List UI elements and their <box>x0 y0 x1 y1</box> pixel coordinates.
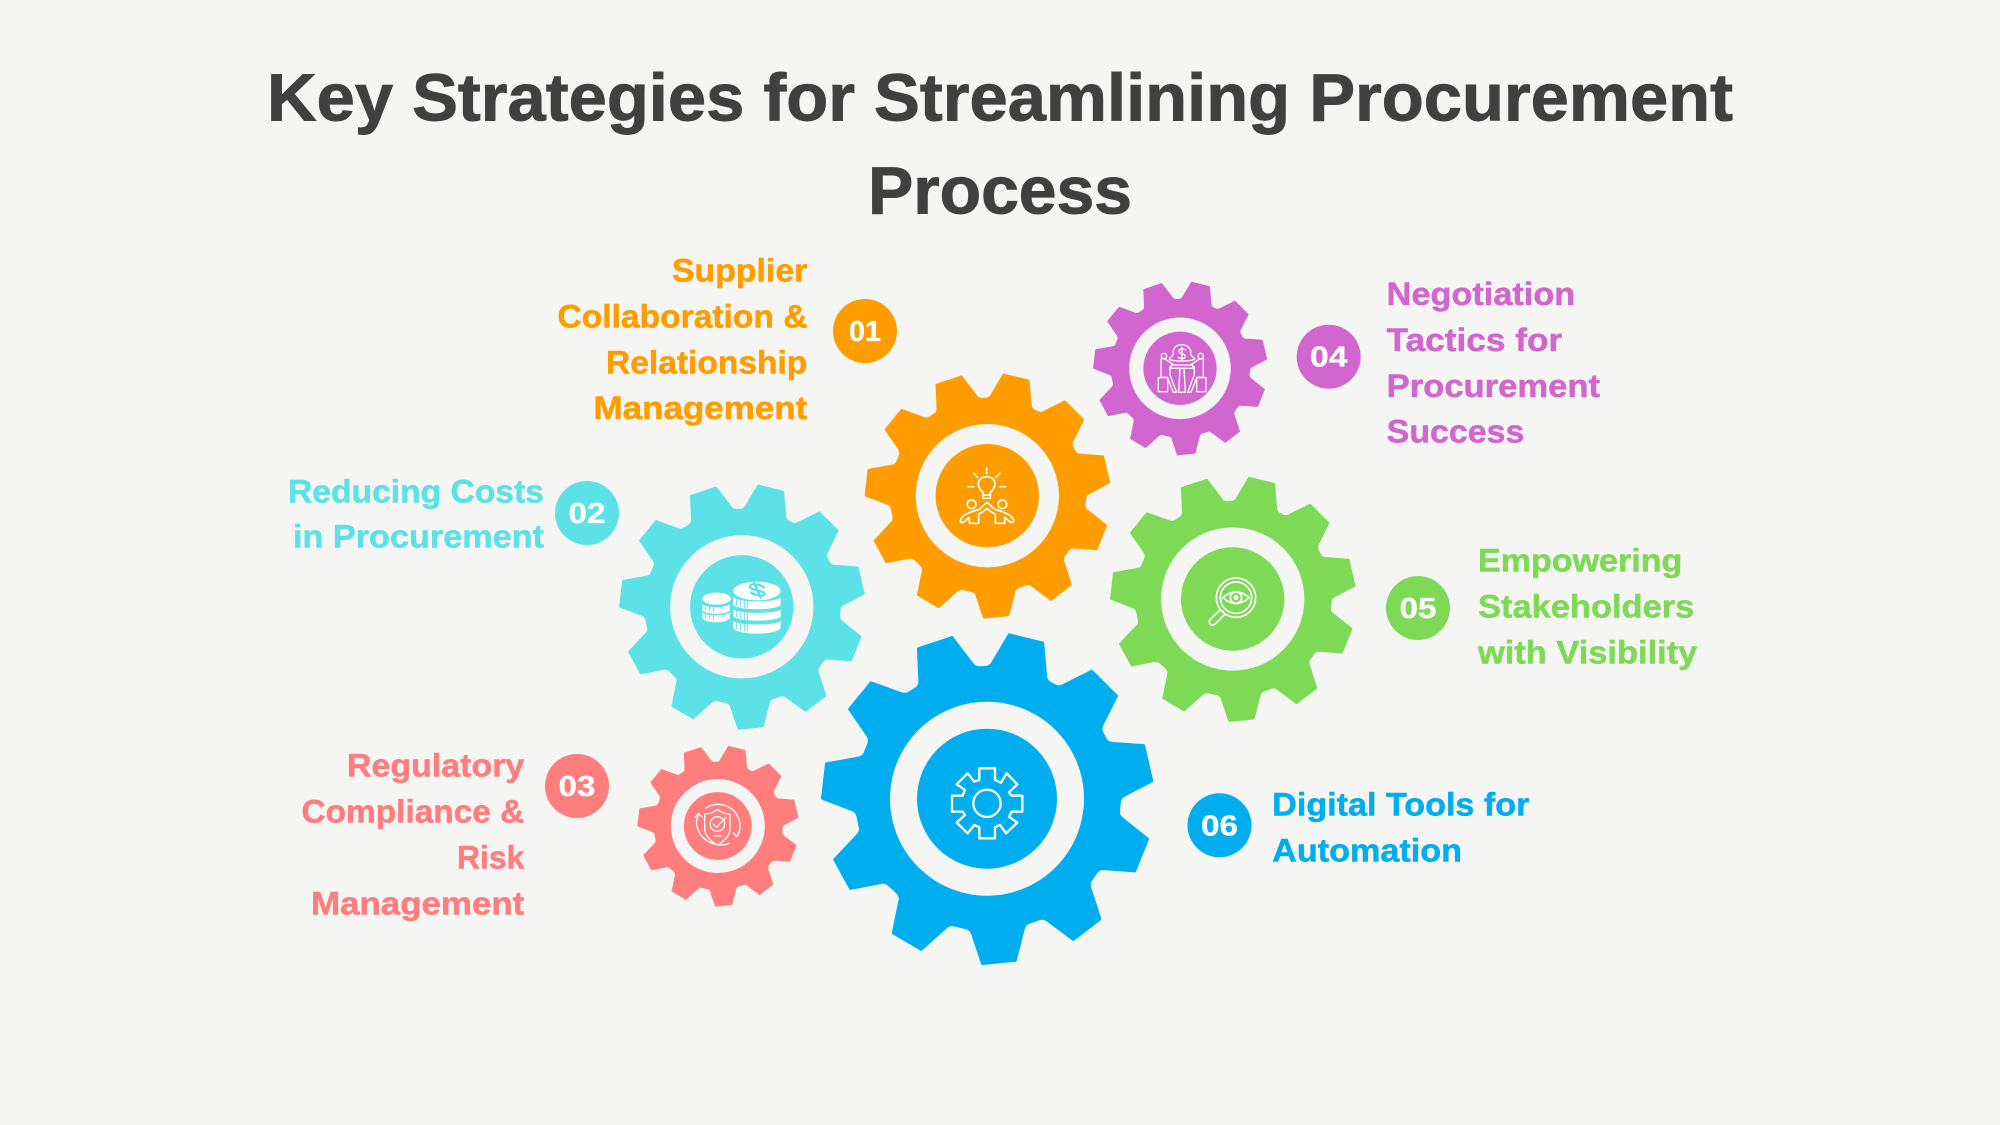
title: Process <box>868 154 1132 228</box>
gear 03 <box>638 747 798 906</box>
panel: 05 empowering stakeholders <box>1111 478 1698 721</box>
title: Key Strategies for Streamlining Procurement <box>267 60 1733 136</box>
label text 02: in Procurement <box>293 518 544 554</box>
icon: magnifying glass with eye <box>1209 578 1256 625</box>
title <box>267 60 1733 228</box>
icon: coin stacks <box>702 582 781 634</box>
label text 04: Success <box>1387 414 1524 450</box>
label text 01: Collaboration & <box>558 299 808 335</box>
gear 05 <box>1111 478 1355 721</box>
number badge 04 <box>1297 325 1361 389</box>
label text 05: with Visibility <box>1477 634 1698 670</box>
label text 01: Relationship <box>606 344 807 380</box>
label text 06: Automation <box>1272 833 1462 869</box>
number badge 05: 05 <box>1400 593 1436 625</box>
label text 05: Stakeholders <box>1478 589 1694 625</box>
number badge 03: 03 <box>558 771 596 803</box>
number badge 01 <box>833 299 897 363</box>
panel: 04 negotiation tactics <box>1094 276 1600 455</box>
label text 03: Risk <box>457 840 525 876</box>
number badge 05 <box>1386 576 1450 640</box>
panel: 01 supplier collaboration <box>558 253 1109 618</box>
label text 04: Negotiation <box>1387 276 1575 312</box>
number badge 06: 06 <box>1201 810 1238 842</box>
number badge 02 <box>555 481 619 545</box>
label text 05: Empowering <box>1478 543 1682 579</box>
gear 02 <box>620 486 864 729</box>
icon: light bulb and two people <box>960 468 1014 523</box>
label text 01: Management <box>594 390 808 426</box>
icon: cog outline <box>952 768 1022 838</box>
number badge 06 <box>1188 793 1252 857</box>
number badge 03 <box>545 754 609 818</box>
label text 06 <box>1272 787 1529 869</box>
icon: negotiation at table with money bag <box>1158 345 1206 392</box>
number badge 02: 02 <box>568 498 606 530</box>
panel: 06 digital tools <box>822 635 1529 964</box>
gear 01 <box>866 375 1109 618</box>
icon: shield with check and arrows <box>695 804 740 845</box>
label text 02 <box>288 473 544 554</box>
label text 03: Regulatory <box>347 748 525 784</box>
label text 03 <box>302 748 525 921</box>
label text 03: Management <box>311 885 525 921</box>
label text 01: Supplier <box>672 253 807 289</box>
panel: 02 reducing costs <box>288 473 864 729</box>
panel: 03 regulatory compliance <box>302 747 798 921</box>
label text 06: Digital Tools for <box>1272 787 1529 823</box>
number badge 04: 04 <box>1310 342 1348 374</box>
number badge 01: 01 <box>849 316 881 348</box>
label text 03: Compliance & <box>302 794 524 830</box>
gear 04 <box>1094 282 1266 455</box>
label text 04: Tactics for <box>1387 322 1562 358</box>
label text 05 <box>1477 543 1698 670</box>
label text 04 <box>1387 276 1600 450</box>
label text 04: Procurement <box>1387 368 1600 404</box>
label text 02: Reducing Costs <box>288 473 544 509</box>
gear 06 <box>822 635 1152 964</box>
label text 01 <box>558 253 808 426</box>
